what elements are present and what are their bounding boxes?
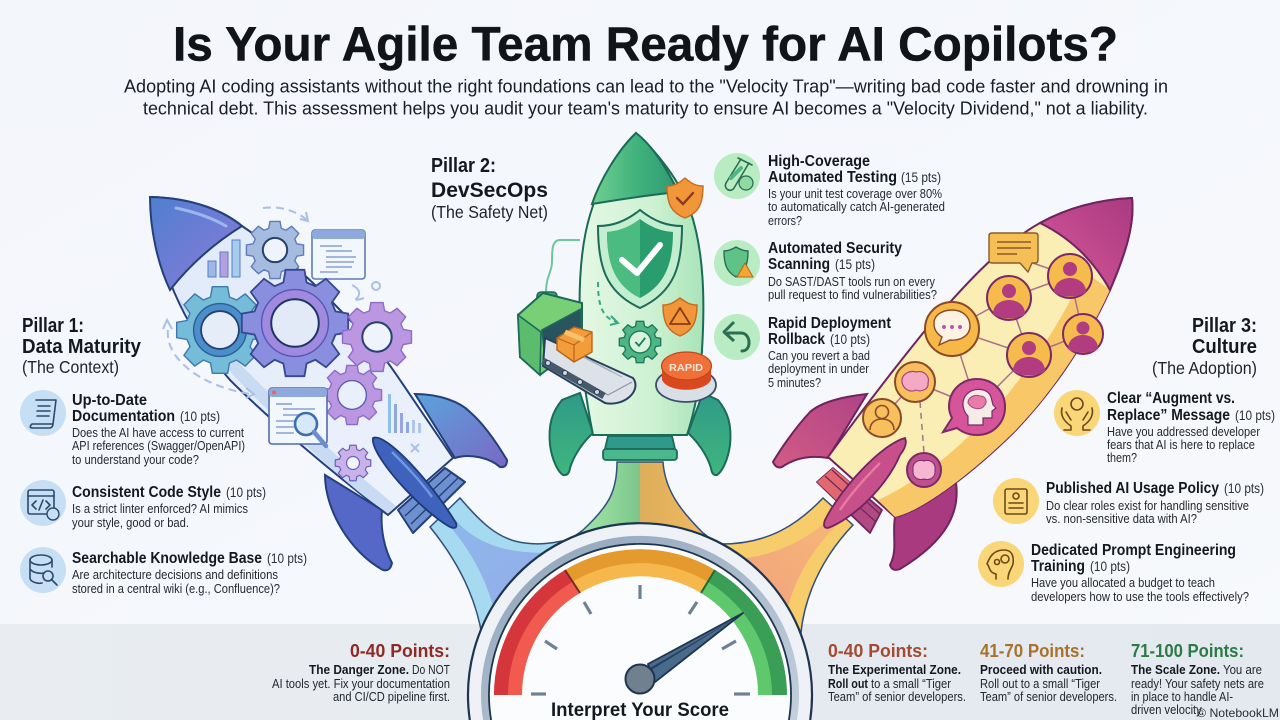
item: dedicated prompt engineering training: (10 pts) bbox=[1090, 558, 1130, 574]
item: searchable knowledge base: Searchable Knowledge Base bbox=[72, 550, 262, 567]
pillar 2 heading: DevSecOps bbox=[431, 179, 548, 202]
item: augment vs replace message: Have you addressed developer bbox=[1107, 425, 1260, 439]
small glyphs on rocket body bbox=[352, 282, 419, 452]
item: up-to-date documentation bbox=[72, 392, 245, 467]
item: published ai usage policy: Do clear roles exist for handling sensitive bbox=[1046, 499, 1249, 513]
item: automated security scanning: Scanning bbox=[768, 256, 830, 273]
item: consistent code style: your style, good or bad. bbox=[72, 516, 189, 530]
score tier: danger zone: The Danger Zone. bbox=[309, 662, 409, 677]
pillar 2 heading bbox=[431, 155, 548, 222]
package bbox=[557, 327, 592, 362]
item: published ai usage policy: vs. non-sensitive data with AI? bbox=[1046, 512, 1197, 526]
icon: test tube bbox=[714, 153, 760, 199]
brain node bbox=[895, 362, 935, 402]
gauge bezel bbox=[468, 523, 812, 720]
green gear bbox=[619, 321, 661, 363]
rocket 2 nozzle bbox=[603, 436, 677, 460]
score tier: proceed with caution: 41-70 Points: bbox=[980, 640, 1085, 661]
score gauge bbox=[468, 523, 812, 720]
score tier: danger zone: AI tools yet. Fix your documentation bbox=[272, 676, 450, 691]
item: high-coverage automated testing: Is your unit test coverage over 80% bbox=[768, 187, 942, 201]
score tier: danger zone bbox=[272, 640, 450, 704]
person node 1 bbox=[987, 276, 1031, 320]
item: rapid deployment rollback: (10 pts) bbox=[830, 331, 870, 347]
icon: security shield with warning bbox=[714, 240, 760, 286]
rocket 3 nozzle bbox=[817, 468, 882, 533]
rocket 1 lower fin bbox=[325, 475, 392, 570]
score tier: experimental zone: 0-40 Points: bbox=[828, 640, 928, 661]
pillar 2 heading: (The Safety Net) bbox=[431, 202, 548, 222]
item: published ai usage policy: Published AI Usage Policy bbox=[1046, 480, 1219, 497]
rocket 3: culture bbox=[773, 198, 1133, 570]
item: automated security scanning: Automated Security bbox=[768, 240, 902, 257]
rocket 3 lower fin bbox=[890, 477, 957, 570]
rocket 2 right fin bbox=[688, 393, 730, 475]
item: high-coverage automated testing: High-Coverage bbox=[768, 153, 870, 170]
panel: pillar 2 devsecops bbox=[431, 153, 945, 390]
pillar 1 heading: (The Context) bbox=[22, 357, 119, 377]
item: high-coverage automated testing: Automated Testing bbox=[768, 169, 897, 186]
pillar 2 heading: Pillar 2: bbox=[431, 155, 496, 177]
item: high-coverage automated testing bbox=[768, 153, 945, 228]
intro paragraph bbox=[124, 76, 1168, 118]
pillar 1 heading bbox=[22, 315, 142, 377]
rocket 3 left fin bbox=[773, 394, 867, 467]
panel: pillar 3 culture bbox=[978, 315, 1275, 604]
orange warning shield bbox=[663, 298, 697, 336]
code window top bbox=[312, 230, 365, 279]
code window with magnifier bbox=[269, 388, 327, 446]
pillar 3 heading: (The Adoption) bbox=[1152, 358, 1257, 378]
copyright credit: © NotebookLM bbox=[1197, 706, 1279, 720]
item: rapid deployment rollback: Rollback bbox=[768, 331, 825, 348]
score tier: scale zone: The Scale Zone. bbox=[1131, 662, 1220, 677]
large purple gear bbox=[242, 270, 348, 376]
brain circle lower bbox=[907, 453, 941, 487]
main shield bbox=[598, 210, 682, 308]
item: rapid deployment rollback bbox=[768, 315, 891, 390]
pillar 1 heading: Pillar 1: bbox=[22, 315, 84, 337]
panel: pillar 1 data maturity bbox=[20, 315, 307, 596]
item: consistent code style: Is a strict linter enforced? AI mimics bbox=[72, 502, 248, 516]
icon: head with gears bbox=[978, 541, 1024, 587]
item: consistent code style bbox=[72, 484, 266, 530]
pillar 3 heading: Culture bbox=[1192, 336, 1257, 358]
rocket 1 upper fin bbox=[415, 394, 507, 467]
score tier: scale zone: ready! Your safety nets are bbox=[1131, 676, 1264, 691]
dashed cycle arrows bbox=[163, 208, 308, 398]
rocket 3 centre fin bbox=[824, 438, 906, 528]
dashed pipeline arrow bbox=[598, 282, 618, 325]
icon: code window bbox=[20, 480, 66, 526]
purple gear right bbox=[343, 303, 411, 371]
rocket 1: data maturity bbox=[150, 197, 507, 570]
rocket 2 left fin bbox=[550, 393, 593, 475]
score tier: scale zone: driven velocity. bbox=[1131, 702, 1204, 717]
score tier: scale zone: You are bbox=[1223, 662, 1262, 677]
item: high-coverage automated testing: (15 pts) bbox=[901, 169, 941, 185]
item: consistent code style: (10 pts) bbox=[226, 484, 266, 500]
score tier: experimental zone bbox=[828, 640, 966, 704]
score tier: proceed with caution bbox=[980, 640, 1117, 704]
person node 2 bbox=[1048, 254, 1092, 298]
score tier: experimental zone: to a small “Tiger bbox=[871, 676, 952, 691]
item: searchable knowledge base: (10 pts) bbox=[267, 550, 307, 566]
score tier: scale zone: in place to handle AI- bbox=[1131, 689, 1233, 704]
rocket 1 body bbox=[150, 197, 453, 515]
bar chart top bbox=[208, 240, 240, 277]
score tier: proceed with caution: Roll out to a small “Tiger bbox=[980, 676, 1101, 691]
item: high-coverage automated testing: errors? bbox=[768, 214, 802, 228]
icon: database search bbox=[20, 547, 66, 593]
item: up-to-date documentation: Does the AI have access to current bbox=[72, 426, 244, 440]
AI head bubble bbox=[943, 379, 1005, 435]
intro paragraph: technical debt. This assessment helps you audit your team's maturity to ensure AI becomes a "Velocity Dividend," not a liability. bbox=[143, 98, 1148, 118]
gauge ticks bbox=[531, 585, 750, 694]
rocket 2 nose bbox=[592, 133, 678, 204]
item: dedicated prompt engineering training bbox=[1031, 542, 1249, 604]
rocket 2 body bbox=[580, 133, 703, 435]
icon: policy document bbox=[993, 478, 1039, 524]
score tier: proceed with caution: Team” of senior developers. bbox=[980, 689, 1117, 704]
person node 3 bbox=[1007, 333, 1051, 377]
item: augment vs replace message: Clear “Augment vs. bbox=[1107, 390, 1235, 407]
rocket 3 body bbox=[828, 198, 1133, 517]
conveyor machine bbox=[518, 292, 582, 375]
score tier: danger zone: 0-40 Points: bbox=[350, 640, 450, 661]
teal gear bbox=[177, 287, 263, 373]
score tier: experimental zone: Team” of senior developers. bbox=[828, 689, 966, 704]
rocket 1 nose bbox=[150, 197, 242, 290]
item: automated security scanning: pull request to find vulnerabilities? bbox=[768, 288, 937, 302]
score tier: scale zone bbox=[1131, 640, 1264, 717]
item: dedicated prompt engineering training: Training bbox=[1031, 558, 1085, 575]
item: augment vs replace message: fears that AI is here to replace bbox=[1107, 438, 1255, 452]
rocket 1 centre fin bbox=[373, 437, 456, 528]
item: dedicated prompt engineering training: Dedicated Prompt Engineering bbox=[1031, 542, 1236, 559]
item: up-to-date documentation: to understand your code? bbox=[72, 453, 199, 467]
item: searchable knowledge base: Are architecture decisions and definitions bbox=[72, 568, 278, 582]
orange shield top bbox=[667, 178, 703, 218]
item: rapid deployment rollback: Can you revert a bad bbox=[768, 349, 870, 363]
icon: rollback arrow bbox=[714, 314, 760, 360]
person outline node bbox=[863, 399, 901, 437]
item: dedicated prompt engineering training: developers how to use the tools effectively? bbox=[1031, 590, 1249, 604]
item: published ai usage policy: (10 pts) bbox=[1224, 480, 1264, 496]
icon: open hands bbox=[1054, 390, 1100, 436]
pipe to machine bbox=[546, 240, 580, 292]
score tier: experimental zone: The Experimental Zone. bbox=[828, 662, 961, 677]
score tier: danger zone: Do NOT bbox=[412, 662, 450, 677]
item: up-to-date documentation: Up-to-Date bbox=[72, 392, 147, 409]
item: rapid deployment rollback: deployment in under bbox=[768, 362, 869, 376]
item: up-to-date documentation: API references (Swagger/OpenAPI) bbox=[72, 439, 245, 453]
gear top bbox=[246, 221, 304, 279]
bar chart lower bbox=[388, 394, 421, 433]
icon: documentation scroll bbox=[20, 390, 66, 436]
rocket 2: devsecops bbox=[518, 133, 730, 475]
item: automated security scanning bbox=[768, 240, 937, 302]
item: consistent code style: Consistent Code Style bbox=[72, 484, 221, 501]
item: rapid deployment rollback: Rapid Deployment bbox=[768, 315, 891, 332]
red zone bbox=[494, 570, 580, 695]
item: up-to-date documentation: Documentation bbox=[72, 408, 175, 425]
needle bbox=[626, 613, 743, 694]
rapid button: RAPID bbox=[669, 363, 703, 374]
title: Is Your Agile Team Ready for AI Copilots? bbox=[173, 18, 1118, 72]
score band background bbox=[0, 624, 1280, 720]
item: high-coverage automated testing: to automatically catch AI-generated bbox=[768, 200, 945, 214]
pillar 3 heading bbox=[1152, 315, 1257, 378]
score tier: danger zone: and CI/CD pipeline first. bbox=[333, 689, 450, 704]
item: automated security scanning: (15 pts) bbox=[835, 256, 875, 272]
item: rapid deployment rollback: 5 minutes? bbox=[768, 376, 821, 390]
item: augment vs replace message bbox=[1107, 390, 1275, 465]
network links bbox=[882, 262, 1083, 453]
chat node bbox=[925, 302, 979, 356]
pillar 1 heading: Data Maturity bbox=[22, 336, 142, 358]
pillar 3 heading: Pillar 3: bbox=[1192, 315, 1257, 337]
small purple gear bbox=[335, 445, 371, 481]
item: searchable knowledge base: stored in a central wiki (e.g., Confluence)? bbox=[72, 582, 280, 596]
item: up-to-date documentation: (10 pts) bbox=[180, 408, 220, 424]
conveyor belt bbox=[543, 338, 635, 404]
intro paragraph: Adopting AI coding assistants without the right foundations can lead to the "Velocity Trap"—writing bad code faster and drowning in bbox=[124, 76, 1168, 96]
item: augment vs replace message: them? bbox=[1107, 451, 1137, 465]
item: published ai usage policy bbox=[1046, 480, 1264, 526]
score tier: experimental zone: Roll out bbox=[828, 676, 869, 691]
item: dedicated prompt engineering training: Have you allocated a budget to teach bbox=[1031, 576, 1215, 590]
item: augment vs replace message: Replace” Message bbox=[1107, 407, 1230, 424]
rapid button bbox=[656, 352, 716, 402]
item: automated security scanning: Do SAST/DAST tools run on every bbox=[768, 275, 936, 289]
score tier: proceed with caution: Proceed with caution. bbox=[980, 662, 1102, 677]
purple gear lower bbox=[322, 365, 382, 425]
item: searchable knowledge base bbox=[72, 550, 307, 596]
rocket 1 nozzle bbox=[398, 468, 465, 533]
amber zone bbox=[565, 549, 715, 593]
speech bubble bbox=[989, 233, 1038, 272]
green zone bbox=[701, 570, 787, 695]
person node 4 bbox=[1063, 314, 1103, 354]
score tier: scale zone: 71-100 Points: bbox=[1131, 640, 1244, 661]
exhaust trails converging on gauge bbox=[430, 462, 853, 650]
rocket 3 nose bbox=[1040, 198, 1133, 290]
